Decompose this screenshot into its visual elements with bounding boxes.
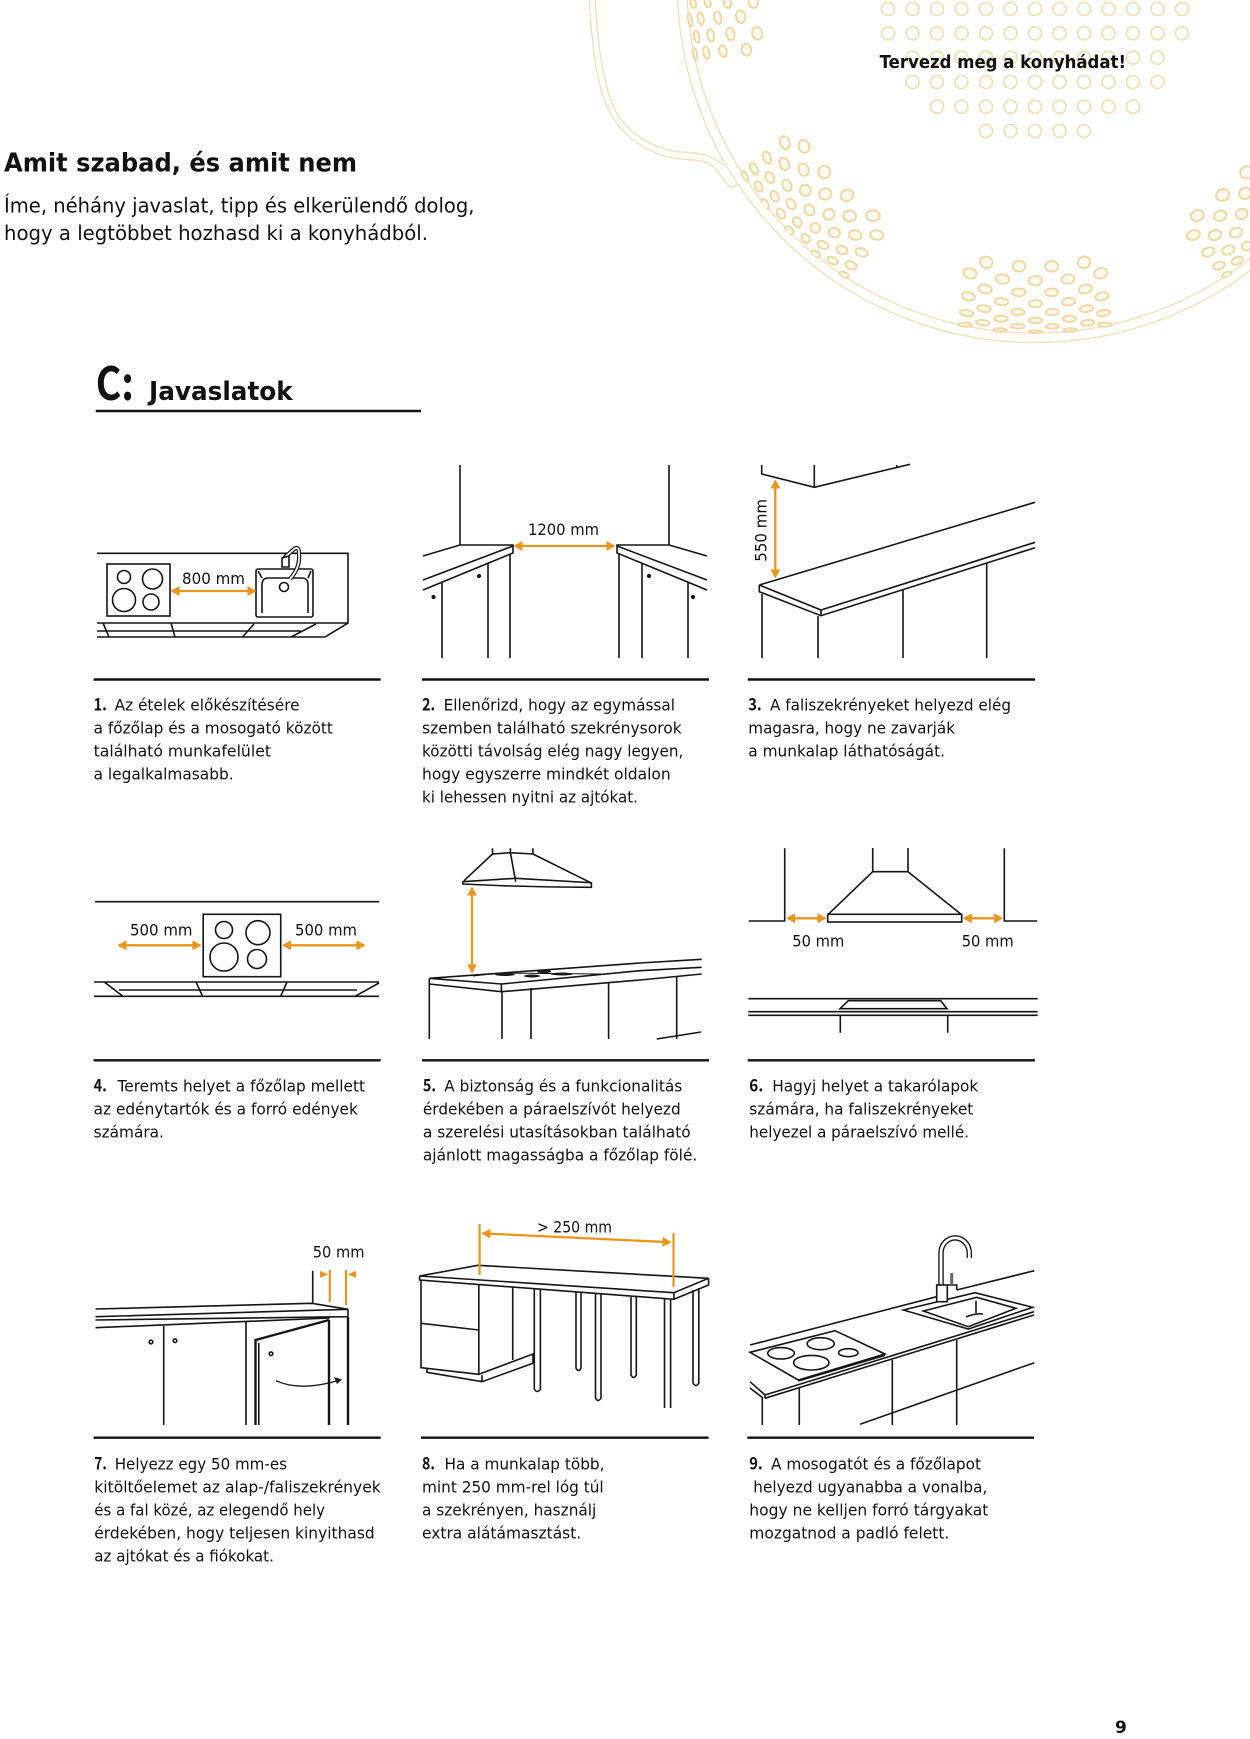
text block 8: 8. [422, 1449, 435, 1474]
rule [422, 1059, 709, 1062]
strainer holes: clipped groups [687, 0, 1250, 333]
arrow: left 500 mm [119, 944, 200, 946]
text block 9: helyezd ugyanabba a vonalba, [753, 1477, 987, 1496]
arrow: hood height [471, 888, 473, 972]
text block 1: Az ételek előkészítésére [115, 696, 300, 714]
diagram 3 [759, 464, 1035, 658]
text block 9 [749, 1449, 988, 1542]
rule [748, 678, 1035, 681]
text block 5: ajánlott magasságba a főzőlap fölé. [423, 1146, 697, 1164]
panel 3: wall cabinet height [748, 464, 1035, 760]
text block 4: számára. [94, 1122, 164, 1142]
page title: Amit szabad, és amit nem [4, 149, 357, 179]
text block 2: szemben található szekrénysorok [422, 718, 683, 738]
rule [421, 1436, 709, 1439]
rule [94, 1059, 381, 1062]
text block 3: magasra, hogy ne zavarják [748, 718, 956, 738]
label: 550 mm: 550 mm [752, 499, 770, 562]
text block 7: Helyezz egy 50 mm-es [115, 1454, 287, 1473]
rule [94, 678, 381, 681]
label: 1200 mm: 1200 mm [528, 520, 599, 539]
text block 2: 2. [422, 690, 435, 716]
text block 7: érdekében, hogy teljesen kinyithasd [94, 1523, 375, 1542]
diagram 2 [423, 465, 707, 658]
panel 7: filler between cabinets and wall [94, 1242, 382, 1565]
panel 8: overhanging worktop [420, 1218, 709, 1542]
section heading: C: Javaslatok: C: [96, 348, 134, 414]
text block 5: A biztonság és a funkcionalitás [444, 1076, 682, 1096]
text block 3 [748, 690, 1011, 760]
text block 4: Teremts helyet a főzőlap mellett [117, 1076, 365, 1096]
label: left 50 mm: 50 mm [792, 932, 844, 951]
label: left 500 mm: 500 mm [130, 920, 192, 939]
text block 5 [423, 1072, 697, 1164]
intro text: hogy a legtöbbet hozhasd ki a konyhádból. [4, 221, 428, 245]
arrow: right 50 mm [964, 917, 1002, 919]
strainer holes: top grid [882, 2, 1188, 138]
text block 1: 1. [94, 690, 107, 716]
diagram 9 [750, 1238, 1034, 1425]
intro text: Íme, néhány javaslat, tipp és elkerülendő dolog, [4, 193, 474, 218]
text block 2 [422, 690, 683, 806]
diagram 6 [748, 848, 1038, 1033]
strainer rim [677, 0, 1250, 343]
running header: Tervezd meg a konyhádat! [880, 53, 1126, 73]
text block 7: az ajtókat és a fiókokat. [94, 1546, 274, 1565]
text block 7: 7. [94, 1449, 107, 1474]
text block 1 [94, 690, 333, 784]
arrow: left 50 mm [788, 917, 825, 919]
text block 2: közötti távolság elég nagy legyen, [422, 742, 683, 760]
diagram 4 [94, 902, 379, 996]
rule [748, 1059, 1035, 1062]
panel 1: hob to sink distance [94, 548, 381, 784]
text block 8: mint 250 mm-rel lóg túl [422, 1477, 604, 1496]
text block 6: számára, ha faliszekrényeket [749, 1100, 973, 1118]
text block 6: Hagyj helyet a takarólapok [772, 1076, 979, 1096]
decoration: strainer illustration [589, 0, 1250, 343]
arrow: right 500 mm [284, 944, 364, 946]
arrow: 1200 mm [515, 545, 614, 547]
dimension: > 250 mm [480, 1224, 674, 1287]
diagram 8 [420, 1265, 709, 1408]
panel 4: space beside the hob [94, 902, 381, 1142]
text block 2: Ellenőrizd, hogy az egymással [444, 696, 675, 714]
text block 3: 3. [748, 690, 762, 716]
text block 5: a szerelési utasításokban található [423, 1122, 691, 1142]
panel 2: distance between cabinet rows [422, 465, 709, 806]
text block 8 [422, 1449, 604, 1542]
text block 7: kitöltőelemet az alap-/faliszekrények [94, 1477, 382, 1496]
text block 7 [94, 1449, 382, 1565]
text block 7: és a fal közé, az elegendő hely [94, 1500, 325, 1519]
text block 9: 9. [749, 1449, 763, 1474]
intro text [4, 193, 474, 245]
text block 4 [94, 1072, 365, 1142]
panel 6: gaps beside the hood [748, 848, 1038, 1142]
rule [422, 678, 709, 681]
text block 1: található munkafelület [94, 742, 271, 760]
text block 1: a legalkalmasabb. [94, 764, 234, 784]
label: 50 mm: 50 mm [313, 1242, 364, 1261]
text block 9: hogy ne kelljen forró tárgyakat [749, 1500, 988, 1519]
text block 9: mozgatnod a padló felett. [749, 1523, 949, 1542]
label: right 500 mm: 500 mm [295, 920, 357, 939]
strainer handle [589, 0, 737, 187]
diagram 5 [429, 848, 702, 1039]
text block 2: ki lehessen nyitni az ajtókat. [422, 788, 638, 806]
text block 1: a főzőlap és a mosogató között [94, 718, 333, 738]
panel 9: sink and hob in line [747, 1238, 1034, 1542]
text block 5: 5. [423, 1072, 436, 1096]
text block 2: hogy egyszerre mindkét oldalon [422, 764, 671, 784]
arrow: 550 mm [774, 481, 776, 577]
label: > 250 mm: > 250 mm [537, 1218, 612, 1237]
panel 5: extractor hood height [422, 848, 709, 1164]
page number: 9 [1115, 1718, 1127, 1738]
label: right 50 mm: 50 mm [962, 932, 1014, 951]
rule [747, 1436, 1034, 1439]
text block 8: a szekrényen, használj [422, 1500, 596, 1519]
arrow: 800 mm [172, 590, 255, 592]
text block 9: A mosogatót és a főzőlapot [771, 1454, 981, 1473]
text block 5: érdekében a páraelszívót helyezd [423, 1100, 681, 1118]
section heading: C: Javaslatok: Javaslatok [147, 377, 293, 407]
diagram 1 [97, 548, 348, 637]
text block 6: 6. [749, 1072, 763, 1096]
text block 4: 4. [94, 1072, 107, 1096]
text block 6: helyezel a páraelszívó mellé. [749, 1122, 969, 1142]
section heading: C: Javaslatok [96, 348, 421, 414]
text block 3: a munkalap láthatóságát. [748, 742, 945, 760]
text block 3: A faliszekrényeket helyezd elég [770, 696, 1011, 714]
text block 8: extra alátámasztást. [422, 1523, 581, 1542]
text block 4: az edénytartók és a forró edények [94, 1100, 359, 1118]
diagram 7 [96, 1271, 348, 1425]
text block 6 [749, 1072, 979, 1142]
rule [94, 1436, 381, 1439]
text block 8: Ha a munkalap több, [444, 1454, 604, 1473]
marker: 50 mm gap with arrowheads [320, 1270, 356, 1305]
label: 800 mm: 800 mm [182, 569, 245, 588]
